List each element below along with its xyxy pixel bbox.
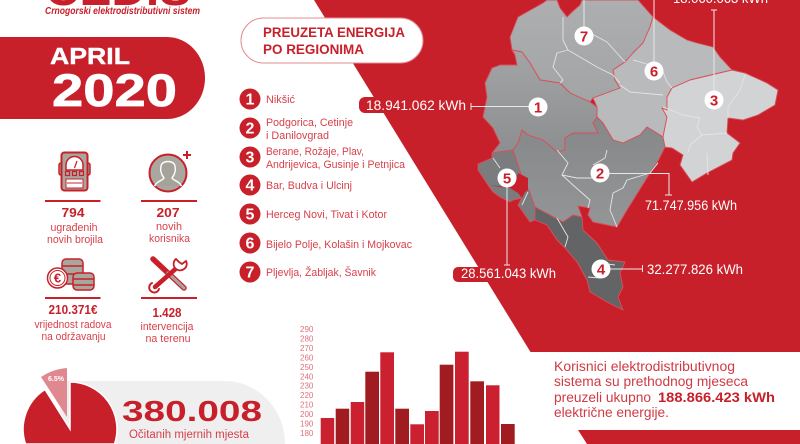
icon: coins: € bbox=[54, 270, 61, 286]
text block: total energy: Korisnici elektrodistributivnog bbox=[554, 359, 735, 374]
bar chart bbox=[300, 325, 515, 444]
legend: regions: Pljevlja, Žabljak, Šavnik bbox=[266, 266, 376, 279]
legend: regions: Berane, Rožaje, Plav, bbox=[266, 146, 364, 158]
stat: field interventions bbox=[140, 297, 197, 345]
map of regions: 4 bbox=[597, 262, 606, 278]
value labels bbox=[359, 0, 768, 282]
stat: new users: novih bbox=[156, 221, 182, 233]
legend: regions: Andrijevica, Gusinje i Petnjica bbox=[266, 159, 406, 171]
bar chart: 230 bbox=[300, 382, 314, 390]
text block: total energy: sistema su prethodnog mjeseca bbox=[554, 374, 748, 389]
value labels: 28.561.043 kWh bbox=[461, 266, 556, 281]
icon: new user bbox=[150, 151, 191, 192]
bar chart: 190 bbox=[300, 420, 314, 428]
bar chart: 280 bbox=[300, 334, 314, 344]
stat: new meters: ugrađenih bbox=[50, 222, 98, 234]
pie chart bbox=[23, 368, 117, 444]
icon: tools bbox=[149, 259, 187, 292]
stat: new users bbox=[141, 200, 197, 245]
legend: regions: Herceg Novi, Tivat i Kotor bbox=[266, 209, 387, 221]
map of regions bbox=[471, 0, 778, 310]
heading: preuzeta energija: PO REGIONIMA bbox=[263, 42, 364, 57]
legend: regions: Bijelo Polje, Kolašin i Mojkovac bbox=[266, 239, 412, 251]
legend: regions bbox=[240, 88, 412, 282]
bar chart: 290 bbox=[300, 325, 314, 334]
text block: total energy: električne energije. bbox=[554, 405, 669, 420]
value labels: 32.277.826 kWh bbox=[647, 262, 743, 277]
stat: field interventions: na terenu bbox=[146, 333, 190, 345]
stat: new meters: 794 bbox=[62, 206, 85, 220]
legend: regions: Bar, Budva i Ulcinj bbox=[266, 180, 352, 192]
legend: regions: 2 bbox=[246, 120, 255, 138]
stat: value of works: na održavanju bbox=[42, 331, 106, 343]
text block: total energy bbox=[554, 359, 775, 420]
legend: regions: Nikšić bbox=[266, 94, 295, 106]
bar chart: 270 bbox=[300, 344, 314, 353]
heading: preuzeta energija: PREUZETA ENERGIJA bbox=[263, 25, 405, 40]
map of regions: 1 bbox=[534, 100, 542, 116]
icon: meter bbox=[59, 152, 90, 190]
legend: regions: 6 bbox=[246, 236, 255, 252]
icon: coins bbox=[48, 259, 94, 290]
stat: value of works: 210.371€ bbox=[48, 303, 98, 317]
bar chart: 220 bbox=[300, 391, 314, 400]
heading: preuzeta energija bbox=[241, 18, 423, 63]
bar chart: 260 bbox=[300, 354, 314, 362]
date banner bbox=[0, 37, 205, 119]
bar chart: 180 bbox=[300, 429, 314, 438]
value labels: 71.747.956 kWh bbox=[645, 198, 737, 213]
date banner: APRIL bbox=[50, 43, 130, 69]
bar chart: 250 bbox=[300, 363, 314, 372]
stat: new meters: novih brojila bbox=[47, 234, 104, 246]
date banner: 2020 bbox=[52, 65, 177, 116]
stat: field interventions: intervencija bbox=[140, 321, 194, 333]
bar chart: 200 bbox=[300, 410, 314, 419]
map of regions: 2 bbox=[596, 166, 604, 182]
stat: field interventions: 1.428 bbox=[152, 306, 182, 320]
text block: total energy: preuzeli ukupno bbox=[554, 390, 651, 405]
map of regions: 7 bbox=[580, 28, 588, 46]
stat: new meters bbox=[45, 200, 104, 246]
value labels: 18.941.062 kWh bbox=[366, 98, 466, 113]
legend: regions: Podgorica, Cetinje bbox=[266, 117, 353, 129]
panel: read meter points bbox=[60, 381, 285, 444]
legend: regions: 7 bbox=[246, 264, 255, 282]
bar chart: 240 bbox=[300, 372, 314, 382]
legend: regions: 3 bbox=[246, 150, 255, 166]
pie chart: 6.5% bbox=[48, 376, 65, 383]
logo: Crnogorski elektrodistributivni sistem bbox=[45, 5, 200, 17]
stat: new users: 207 bbox=[156, 206, 180, 220]
panel: read meter points: Očitanih mjernih mjesta bbox=[129, 429, 250, 441]
bar chart: 210 bbox=[300, 400, 314, 410]
stat: new users: korisnika bbox=[149, 233, 191, 245]
legend: regions: 5 bbox=[246, 206, 255, 224]
legend: regions: 1 bbox=[246, 92, 255, 108]
red diagonal background bbox=[314, 0, 800, 444]
legend: regions: 4 bbox=[246, 178, 255, 194]
map of regions: 6 bbox=[650, 64, 658, 80]
stat: value of works: vrijednost radova bbox=[34, 319, 112, 331]
text block: total energy: 188.866.423 kWh bbox=[658, 390, 775, 405]
panel: read meter points: 380.008 bbox=[122, 396, 262, 428]
legend: regions: i Danilovgrad bbox=[266, 130, 329, 142]
stat: value of works bbox=[34, 297, 112, 343]
map of regions: 5 bbox=[503, 170, 511, 188]
map of regions: 3 bbox=[710, 92, 718, 110]
